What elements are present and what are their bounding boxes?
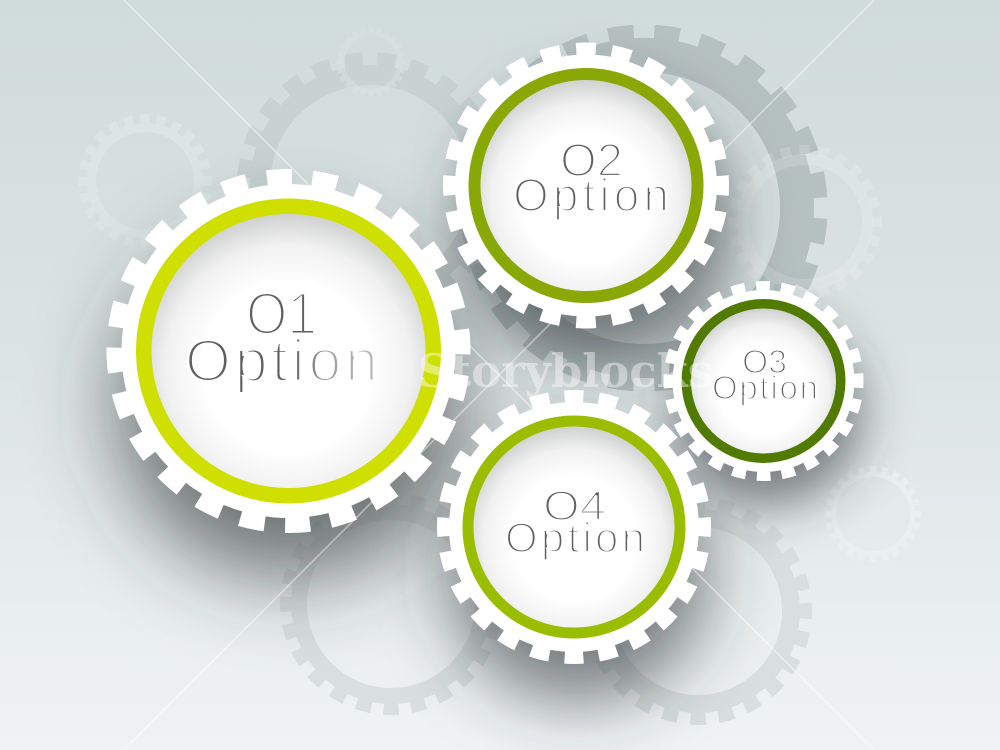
gear 4 number: O4 — [543, 482, 606, 529]
background gear: lower left — [286, 499, 496, 709]
background gear: small lower right — [828, 469, 918, 559]
gear 2 green ring — [468, 68, 704, 303]
gear 3 number: O3 — [742, 343, 787, 380]
background gear: small left — [83, 119, 207, 243]
gear 2 white body — [455, 54, 717, 316]
gear 4: option 04 — [444, 397, 704, 657]
diagonal light lines — [124, 0, 874, 750]
gear 3 label: Option — [712, 369, 818, 406]
background gear: lower right — [591, 504, 805, 718]
gear 3 white body — [672, 290, 854, 472]
gear 1 inner disc — [152, 214, 426, 488]
gear 2 number: O2 — [560, 134, 623, 186]
gear 4 teeth — [444, 397, 704, 657]
background gear: small top — [338, 30, 404, 94]
gear 1 green ring — [136, 198, 441, 504]
gear 2 label: Option — [513, 169, 669, 221]
gear 2 inner disc — [480, 80, 692, 291]
gear 3 green ring — [682, 299, 846, 463]
background gear: large behind option 2 — [469, 33, 819, 383]
gear 1 number: O1 — [246, 281, 317, 347]
gear 1 white body — [122, 184, 456, 518]
gear 1: option 01 — [108, 170, 469, 532]
gear 4 inner disc — [474, 426, 674, 628]
shadow of gear 3 — [674, 318, 862, 506]
watermark: Storyblocks — [418, 344, 713, 398]
background gear: large upper left — [244, 59, 496, 311]
gear 4 label: Option — [505, 514, 645, 561]
gear 3 teeth — [668, 286, 858, 476]
gear 4 white body — [449, 402, 699, 652]
gear 1 label: Option — [185, 328, 378, 394]
gear 1 teeth — [108, 170, 469, 532]
gear 3: option 03 — [668, 286, 858, 476]
gear 3 inner disc — [691, 308, 836, 454]
shadow of gear 1 — [118, 233, 462, 577]
gear 2: option 02 — [450, 50, 722, 322]
gear 4 green ring — [462, 416, 686, 638]
shadow of gear 4 — [448, 442, 708, 702]
shadow of gear 2 — [460, 89, 732, 361]
background gear: light right — [733, 150, 877, 294]
gear 2 teeth — [450, 50, 722, 322]
